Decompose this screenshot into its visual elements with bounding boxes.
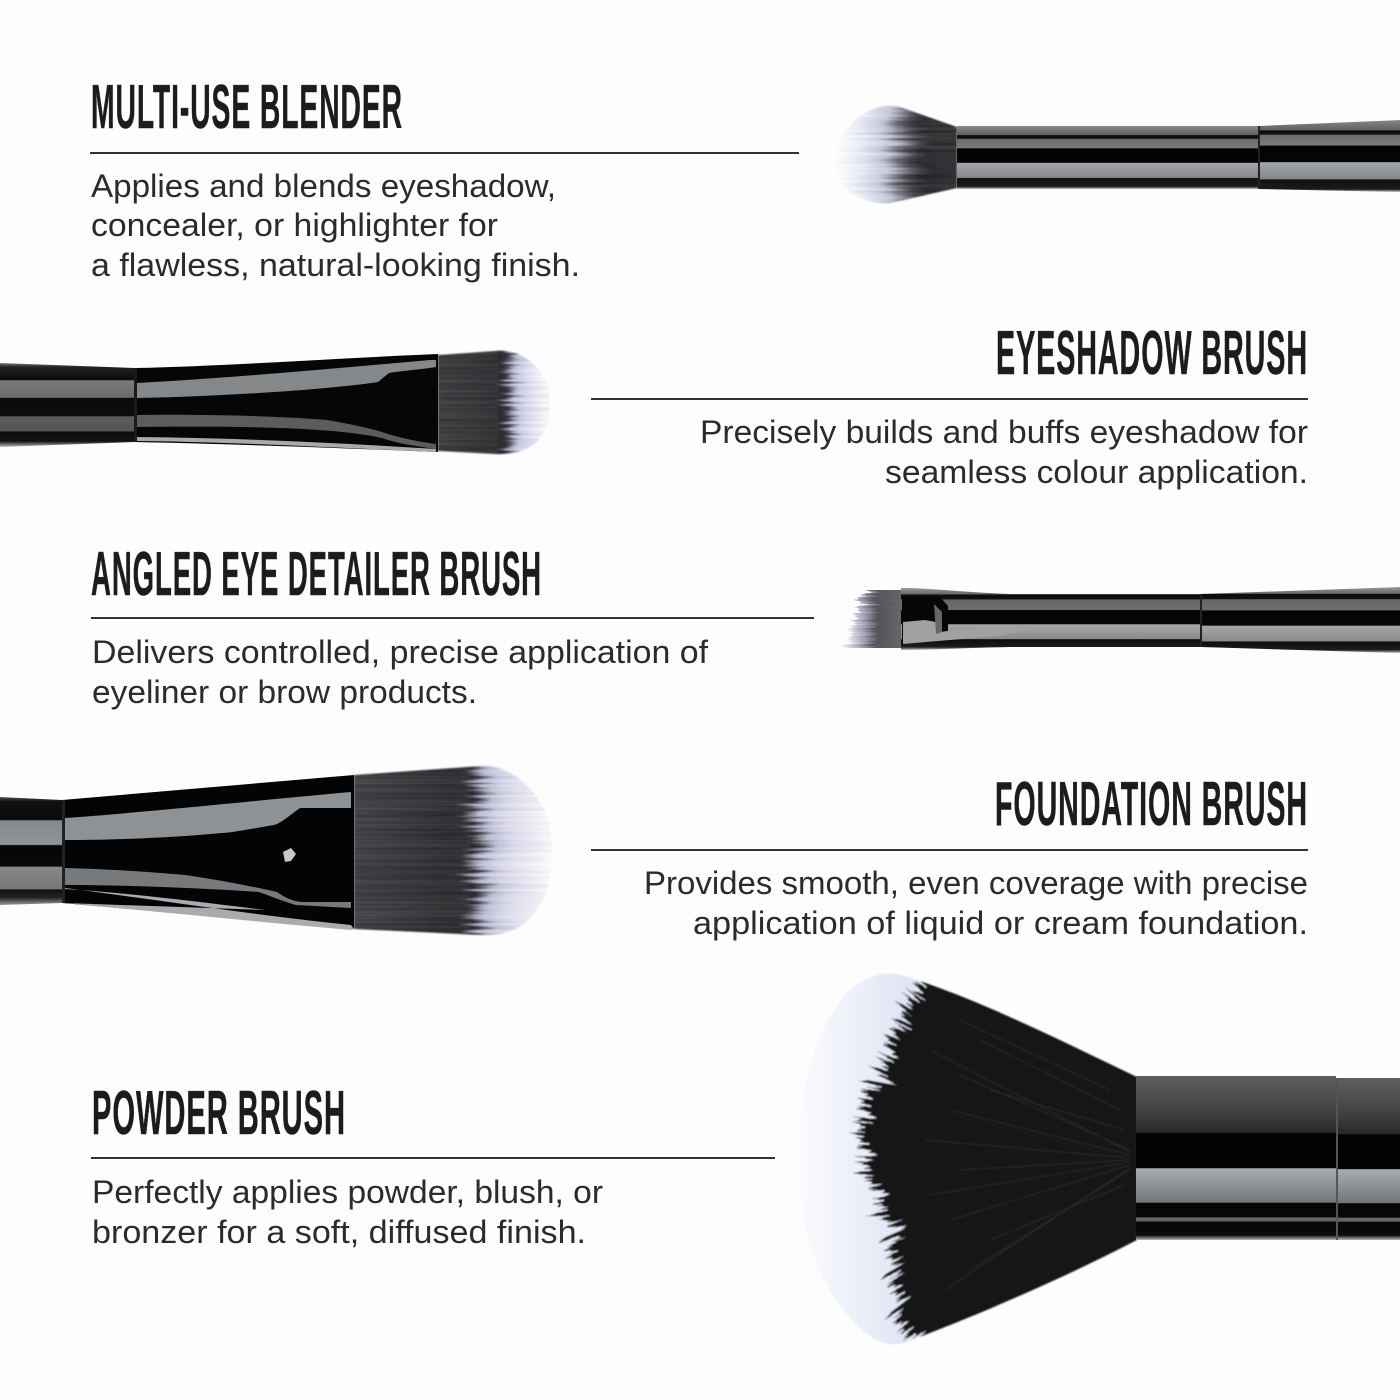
description: angled eye detailer brush: eyeliner or brow products.: [92, 674, 477, 710]
panel: angled eye detailer text: ANGLED EYE DETAILER BRUSH: [91, 540, 542, 609]
panel: powder brush text: [91, 1079, 775, 1250]
panel: multi-use blender text: MULTI-USE BLENDER: [91, 73, 403, 142]
description: angled eye detailer brush: [92, 634, 708, 710]
description: foundation brush: application of liquid or cream foundation.: [693, 905, 1308, 941]
panel: multi-use blender text: [90, 73, 799, 283]
icon: eyeshadow brush: [0, 350, 550, 456]
panel: foundation brush text: [591, 770, 1308, 941]
description: multi-use blender: Applies and blends eyeshadow,: [91, 168, 556, 204]
description: powder brush: bronzer for a soft, diffused finish.: [92, 1214, 586, 1250]
icon: foundation brush: [0, 765, 552, 936]
description: powder brush: [92, 1174, 603, 1250]
description: eyeshadow brush: Precisely builds and buffs eyeshadow for: [700, 414, 1308, 450]
description: foundation brush: [644, 865, 1308, 941]
description: eyeshadow brush: seamless colour application.: [885, 454, 1308, 490]
icon: angled eye detailer brush: [846, 587, 1400, 653]
description: multi-use blender: concealer, or highlighter for: [91, 207, 498, 243]
description: angled eye detailer brush: Delivers controlled, precise application of: [92, 634, 708, 670]
panel: eyeshadow brush text: [591, 319, 1308, 490]
description: foundation brush: Provides smooth, even coverage with precise: [644, 865, 1308, 901]
icon: multi-use blender brush: [839, 105, 1400, 204]
description: eyeshadow brush: [700, 414, 1308, 490]
description: powder brush: Perfectly applies powder, blush, or: [92, 1174, 603, 1210]
panel: powder brush text: POWDER BRUSH: [92, 1079, 346, 1148]
panel: angled eye detailer text: [91, 540, 814, 710]
icon: powder brush: [824, 973, 1400, 1344]
description: multi-use blender: [91, 168, 580, 283]
description: multi-use blender: a flawless, natural-looking finish.: [91, 247, 580, 283]
